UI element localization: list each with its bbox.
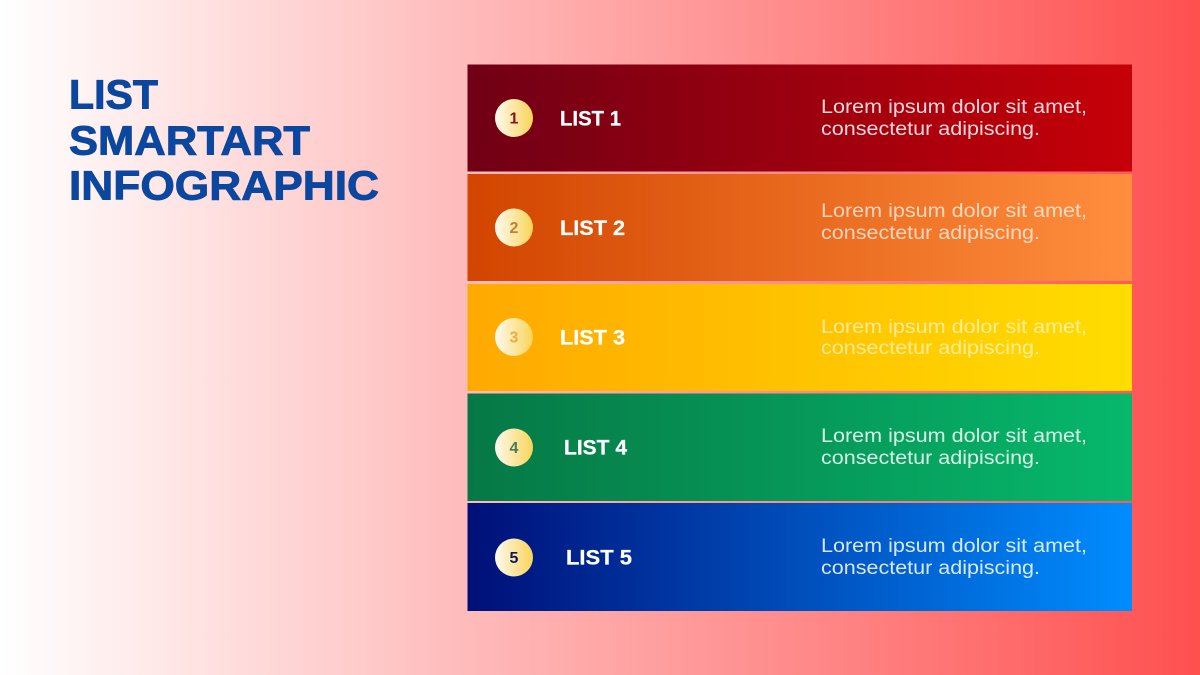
icon: number 2 badge — [495, 208, 533, 246]
text block: list 2 description: consectetur adipiscing. — [821, 223, 1040, 244]
icon: number 4 badge: 4 — [510, 440, 519, 457]
panel: list 4 — [468, 394, 1132, 501]
text block: list 3 description: Lorem ipsum dolor sit amet, — [821, 317, 1087, 338]
title — [69, 72, 379, 208]
panel: list 5 — [468, 503, 1132, 611]
panel: list 1 — [468, 64, 1132, 172]
text block: list 5 description: consectetur adipiscing. — [821, 558, 1040, 579]
text block: list 3 description: consectetur adipiscing. — [821, 338, 1040, 359]
label: list 1: LIST 1 — [560, 108, 621, 130]
icon: number 1 badge: 1 — [510, 110, 519, 128]
label: list 3: LIST 3 — [560, 326, 625, 350]
icon: number 3 badge — [495, 318, 533, 356]
icon: number 5 badge: 5 — [510, 550, 519, 567]
text block: list 5 description — [821, 536, 1087, 579]
text block: list 2 description — [821, 201, 1087, 244]
text block: list 4 description: Lorem ipsum dolor sit amet, — [821, 426, 1087, 447]
text block: list 1 description — [821, 97, 1087, 140]
label: list 5: LIST 5 — [566, 546, 632, 570]
label: list 2: LIST 2 — [560, 217, 625, 240]
panel: list 2 — [468, 174, 1132, 281]
title: INFOGRAPHIC — [69, 162, 379, 208]
label: list 4: LIST 4 — [564, 436, 627, 460]
icon: number 5 badge — [495, 538, 533, 576]
text block: list 3 description — [821, 317, 1087, 359]
title: LIST — [69, 72, 158, 118]
icon: number 3 badge: 3 — [510, 330, 519, 346]
title: SMARTART — [69, 118, 310, 164]
text block: list 5 description: Lorem ipsum dolor sit amet, — [821, 536, 1087, 557]
text block: list 2 description: Lorem ipsum dolor sit amet, — [821, 201, 1087, 222]
icon: number 1 badge — [495, 99, 533, 137]
text block: list 4 description — [821, 426, 1087, 469]
panel: list 3 — [468, 284, 1132, 391]
icon: number 2 badge: 2 — [510, 220, 519, 237]
text block: list 1 description: consectetur adipiscing. — [821, 119, 1040, 140]
text block: list 1 description: Lorem ipsum dolor sit amet, — [821, 97, 1087, 118]
text block: list 4 description: consectetur adipiscing. — [821, 448, 1040, 469]
icon: number 4 badge — [495, 428, 533, 466]
